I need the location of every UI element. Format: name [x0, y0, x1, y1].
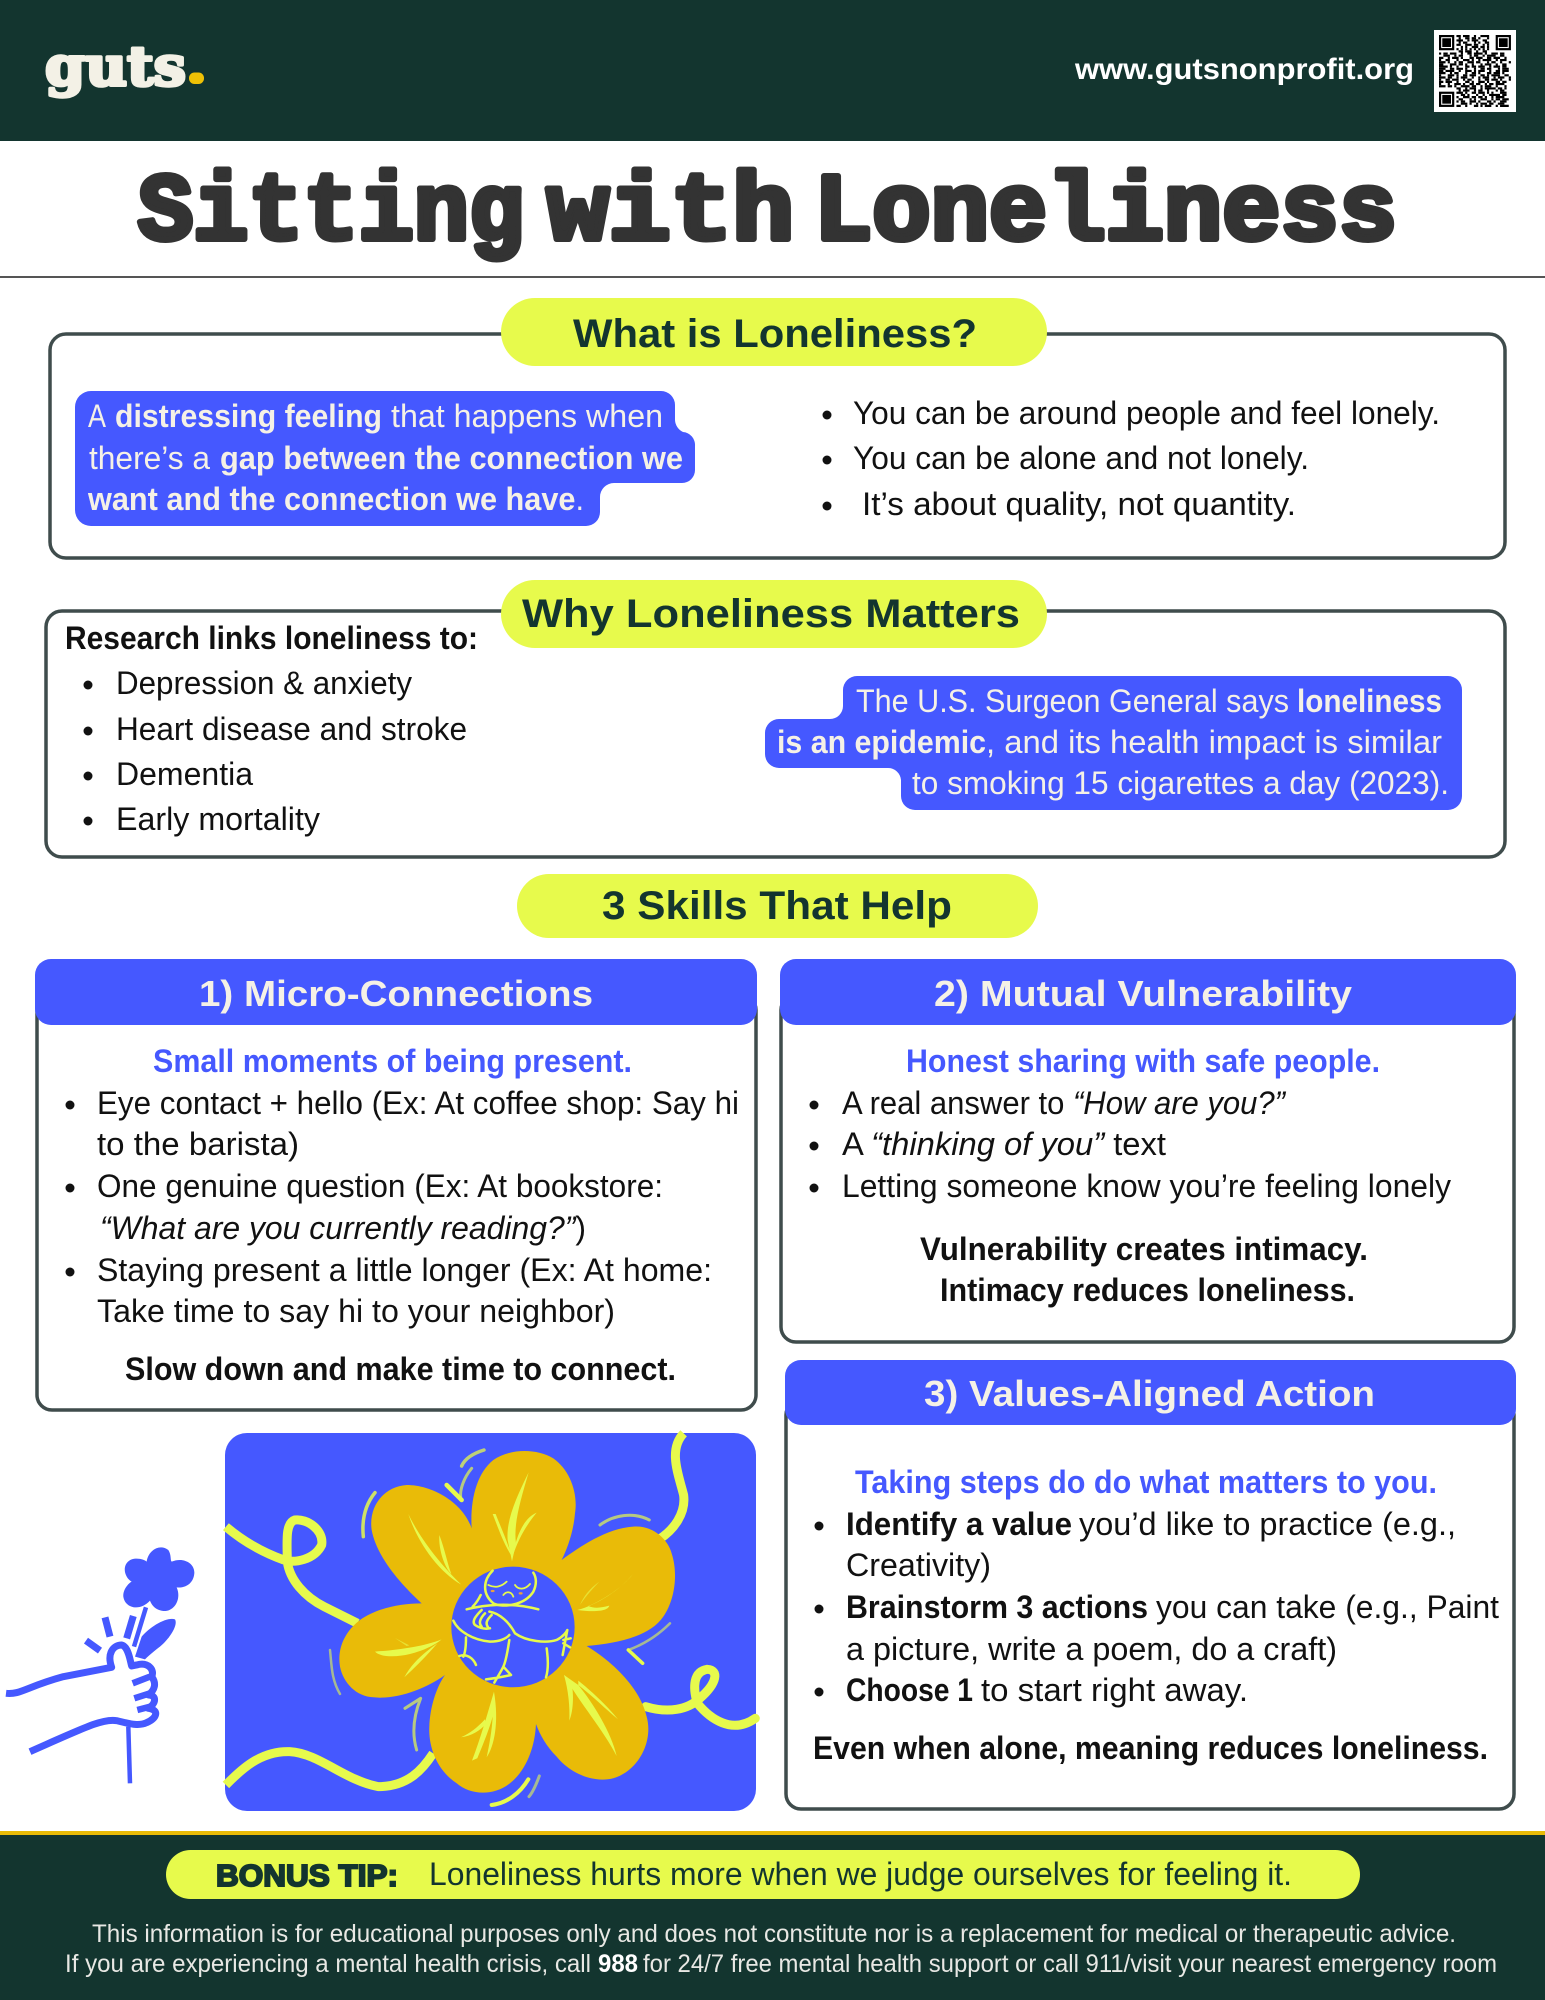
icon: hand holding flower: [6, 1547, 194, 1783]
bullet list: [66, 1085, 739, 1329]
bullet list: Choose 1: [846, 1672, 973, 1708]
bullet list: a picture, write a poem, do a craft): [846, 1631, 1337, 1667]
bullet list: [810, 1085, 1451, 1204]
center opening: [451, 1567, 575, 1687]
bullet list: A “thinking of you” text: [842, 1126, 1166, 1162]
blue definition callout: A: [88, 398, 107, 434]
research list: Research links loneliness to:: [65, 620, 478, 656]
research list: Heart disease and stroke: [116, 711, 467, 747]
panel header: 1) Micro-Connections: [199, 973, 593, 1014]
heading pill: 3 skills: 3 Skills That Help: [602, 884, 952, 928]
bonus tip pill: BONUS TIP:: [216, 1858, 398, 1893]
takeaway: Even when alone, meaning reduces loneliness.: [813, 1730, 1488, 1766]
bullet list: Creativity): [846, 1547, 991, 1583]
disclaimer: This information is for educational purposes only and does not constitute nor is a replacement for medical or therapeutic advice.: [92, 1920, 1456, 1948]
bullet list: to the barista): [97, 1126, 299, 1162]
blue surgeon general callout: loneliness: [1297, 683, 1442, 719]
petal veins: [375, 1472, 633, 1761]
bullet list: about loneliness: You can be alone and not lonely.: [853, 440, 1309, 476]
research list: Dementia: [116, 756, 253, 792]
title: Loneliness: [814, 159, 1397, 268]
disclaimer: 988: [598, 1950, 638, 1978]
heading pill: [501, 298, 1047, 366]
disclaimer: [65, 1920, 1497, 1978]
panel: skill 3 values-aligned action: [785, 1360, 1516, 1809]
bullet list: Eye contact + hello (Ex: At coffee shop: Say hi: [97, 1085, 739, 1121]
panel: what is loneliness: [50, 298, 1505, 558]
bullet list: A real answer to “How are you?”: [842, 1085, 1286, 1121]
footer band: [0, 1831, 1545, 2000]
panel header: [780, 959, 1516, 1025]
title: with: [547, 159, 794, 268]
illustration: person curled in flower: [225, 1433, 756, 1811]
panel header: 3) Values-Aligned Action: [924, 1373, 1375, 1414]
blue surgeon general callout: , and its health impact is similar: [986, 724, 1442, 760]
tagline: Honest sharing with safe people.: [906, 1043, 1380, 1079]
disclaimer: for 24/7 free mental health support or call 911/visit your nearest emergency room: [643, 1950, 1497, 1978]
curled figure: [453, 1571, 571, 1683]
panel: skill 1 micro-connections: [35, 959, 757, 1410]
research list: Depression & anxiety: [116, 665, 412, 701]
research list: Early mortality: [116, 801, 320, 837]
bullet list: about loneliness: You can be around people and feel lonely.: [853, 395, 1440, 431]
bullet list: about loneliness: [822, 395, 1440, 522]
gold petals: [339, 1451, 675, 1793]
disclaimer: If you are experiencing a mental health crisis, call: [65, 1950, 591, 1978]
heading pill: Why Loneliness Matters: [522, 592, 1020, 636]
blue definition callout: [75, 391, 695, 526]
title: [138, 159, 1397, 268]
logo: guts: [45, 34, 186, 98]
panel header: 2) Mutual Vulnerability: [934, 973, 1352, 1014]
title: Sitting: [138, 159, 524, 268]
takeaway: Intimacy reduces loneliness.: [940, 1272, 1355, 1308]
takeaway: Slow down and make time to connect.: [125, 1351, 676, 1387]
bonus tip pill: [166, 1850, 1360, 1899]
research list: [65, 620, 478, 837]
panel: skill 2 mutual vulnerability: [780, 959, 1516, 1342]
blue surgeon general callout: The U.S. Surgeon General says: [856, 683, 1289, 719]
blue surgeon general callout: is an epidemic: [777, 724, 986, 760]
bullet list: Staying present a little longer (Ex: At home:: [97, 1252, 712, 1288]
header band: [0, 0, 1545, 141]
bullet list: you’d like to practice (e.g.,: [1079, 1506, 1456, 1542]
blue definition callout: gap between the connection we: [220, 440, 683, 476]
blue definition callout: distressing feeling: [115, 398, 382, 434]
bullet list: Letting someone know you’re feeling lonely: [842, 1168, 1451, 1204]
blue surgeon general callout: [765, 676, 1462, 810]
heading pill: [501, 580, 1047, 648]
motion marks: [330, 1450, 670, 1805]
website url: www.gutsnonprofit.org: [1074, 53, 1414, 86]
bullet list: Identify a value: [846, 1506, 1072, 1542]
blue definition callout: that happens when: [391, 398, 663, 434]
yellow winding lines: [226, 1433, 755, 1787]
bullet list: Take time to say hi to your neighbor): [97, 1293, 615, 1329]
bullet list: One genuine question (Ex: At bookstore:: [97, 1168, 663, 1204]
panel header: [785, 1360, 1516, 1425]
panel header: [35, 959, 757, 1025]
takeaway: [920, 1231, 1368, 1308]
tagline: Taking steps do do what matters to you.: [855, 1464, 1437, 1500]
takeaway: Vulnerability creates intimacy.: [920, 1231, 1368, 1267]
panel: why loneliness matters: [46, 580, 1505, 857]
bullet list: [814, 1506, 1499, 1708]
QR code: [1434, 30, 1516, 112]
bonus tip pill: Loneliness hurts more when we judge ourselves for feeling it.: [429, 1856, 1292, 1892]
blue definition callout: want and the connection we have.: [87, 481, 584, 517]
heading pill: 3 skills: [517, 874, 1038, 938]
bullet list: about loneliness: It’s about quality, not quantity.: [862, 486, 1296, 522]
tagline: Small moments of being present.: [153, 1043, 632, 1079]
bullet list: to start right away.: [981, 1672, 1248, 1708]
blue surgeon general callout: to smoking 15 cigarettes a day (2023).: [912, 765, 1449, 801]
bullet list: Brainstorm 3 actions: [846, 1589, 1148, 1625]
blue definition callout: there’s a: [89, 440, 210, 476]
heading pill: What is Loneliness?: [573, 312, 977, 356]
bullet list: “What are you currently reading?”): [100, 1210, 586, 1246]
bullet list: you can take (e.g., Paint: [1156, 1589, 1499, 1625]
